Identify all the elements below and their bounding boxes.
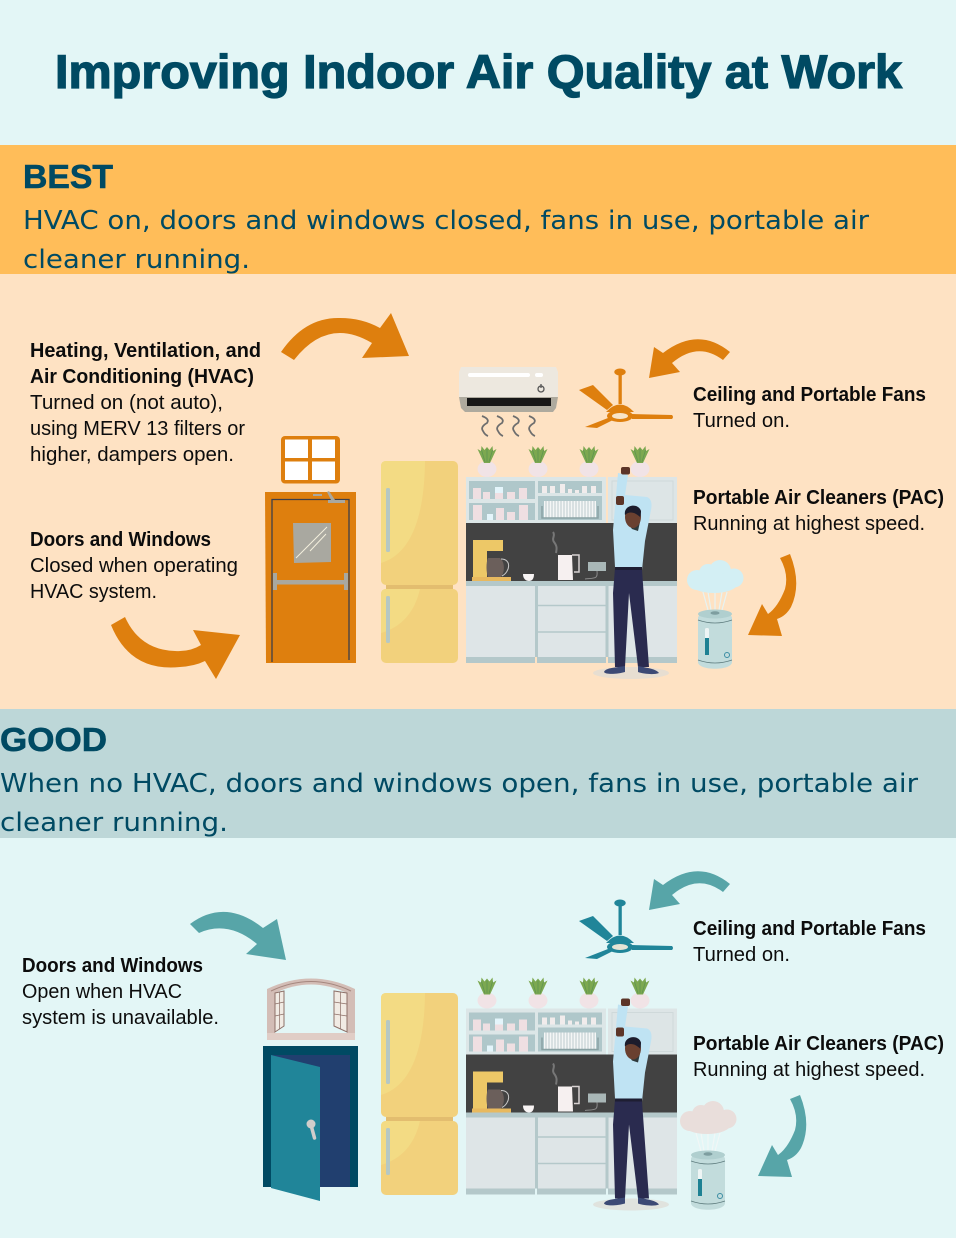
background: top bbox=[0, 0, 956, 145]
arrow: to air cleaner good bbox=[758, 1095, 806, 1177]
icon: dirty air cloud bbox=[680, 1101, 736, 1151]
text block: HVAC: higher, dampers open. bbox=[30, 444, 234, 466]
icon: refrigerator bbox=[381, 461, 458, 663]
text block: air cleaners good: Portable Air Cleaners (PAC) bbox=[693, 1033, 944, 1055]
text block: HVAC: using MERV 13 filters or bbox=[30, 418, 245, 440]
text block: doors and windows closed: HVAC system. bbox=[30, 581, 157, 603]
heading: best: BEST bbox=[23, 158, 113, 195]
text block: doors and windows closed: Doors and Windows bbox=[30, 529, 211, 551]
text block: best summary: HVAC on, doors and windows closed, fans in use, portable air bbox=[23, 206, 869, 236]
icon: closed door bbox=[265, 491, 356, 663]
text block: fans good: Ceiling and Portable Fans bbox=[693, 918, 926, 940]
illustration: kitchen good bbox=[466, 978, 677, 1194]
text block: air cleaners good: Running at highest speed. bbox=[693, 1059, 925, 1081]
text block: air cleaners best: Running at highest speed. bbox=[693, 513, 925, 535]
panel: good scene background bbox=[0, 838, 956, 1238]
arrow: to open door bbox=[190, 912, 286, 960]
text block: fans good: Turned on. bbox=[693, 944, 790, 966]
icon: refrigerator good bbox=[381, 993, 458, 1195]
text block: HVAC: Heating, Ventilation, and bbox=[30, 340, 261, 362]
illustration: kitchen bbox=[466, 446, 677, 663]
arrow: to fan bbox=[649, 339, 730, 378]
arrow: to fan good bbox=[649, 871, 730, 910]
title: Improving Indoor Air Quality at Work bbox=[55, 45, 903, 98]
text block: fans best: Turned on. bbox=[693, 410, 790, 432]
text block: doors and windows open bbox=[22, 955, 219, 1029]
text block: air cleaners best: Portable Air Cleaners (PAC) bbox=[693, 487, 944, 509]
illustration: person stretching good bbox=[593, 998, 669, 1210]
text block: doors and windows closed: Closed when operating bbox=[30, 555, 238, 577]
text block: good summary: cleaner running. bbox=[0, 808, 228, 838]
icon: ceiling fan bbox=[579, 368, 673, 428]
icon: closed window bbox=[281, 436, 340, 484]
text block: doors and windows open: system is unavailable. bbox=[22, 1007, 219, 1029]
arrow: to HVAC bbox=[281, 313, 409, 360]
heading: good: GOOD bbox=[0, 721, 107, 758]
text block: HVAC: Air Conditioning (HVAC) bbox=[30, 366, 254, 388]
text block: doors and windows closed bbox=[30, 529, 238, 603]
icon: open window bbox=[267, 978, 355, 1040]
text block: fans good bbox=[693, 918, 926, 966]
icon: open door bbox=[263, 1046, 358, 1201]
text block: air cleaners good bbox=[693, 1033, 944, 1081]
text block: doors and windows open: Open when HVAC bbox=[22, 981, 182, 1003]
icon: wall air conditioner bbox=[459, 367, 558, 436]
text block: doors and windows open: Doors and Windows bbox=[22, 955, 203, 977]
text block: best summary: cleaner running. bbox=[23, 245, 250, 275]
text block: fans best bbox=[693, 384, 926, 432]
panel: best scene background bbox=[0, 274, 956, 709]
icon: clean air cloud bbox=[687, 560, 744, 610]
text block: fans best: Ceiling and Portable Fans bbox=[693, 384, 926, 406]
panel: best banner bbox=[0, 145, 956, 275]
illustration: person stretching bbox=[593, 467, 669, 679]
arrow: to air cleaner bbox=[748, 554, 796, 636]
icon: ceiling fan good bbox=[579, 900, 673, 959]
text block: HVAC: Turned on (not auto), bbox=[30, 392, 223, 414]
text block: air cleaners best bbox=[693, 487, 944, 535]
text block: good summary: When no HVAC, doors and windows open, fans in use, portable air bbox=[0, 769, 918, 799]
arrow: to door bbox=[111, 617, 240, 679]
panel: good banner bbox=[0, 709, 956, 838]
text block: HVAC bbox=[30, 340, 261, 466]
icon: portable air cleaner good bbox=[691, 1150, 725, 1210]
icon: portable air cleaner bbox=[698, 610, 732, 669]
